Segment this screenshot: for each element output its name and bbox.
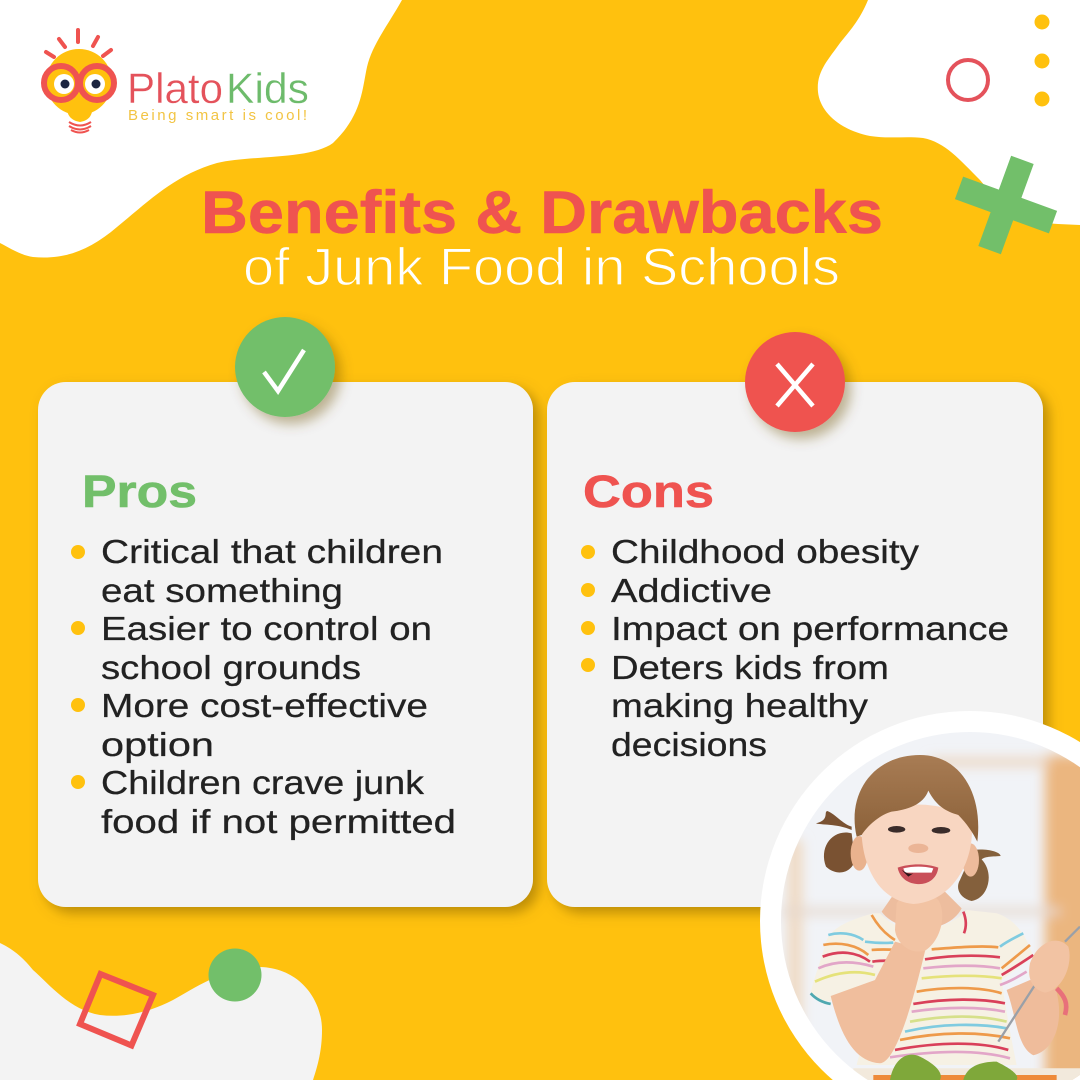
title line 1: Benefits & Drawbacks: [201, 179, 883, 246]
decoration: red ring: [948, 60, 988, 100]
photo white ring: [760, 711, 1080, 1080]
photo: smiling child eating: [760, 711, 1080, 1080]
ears: [851, 836, 868, 871]
cons list: decisions: [611, 727, 767, 764]
cons list: making healthy: [611, 688, 868, 725]
panel: pros: [38, 317, 533, 907]
decoration: green cross: [943, 143, 1069, 267]
right hand: [1029, 941, 1070, 993]
cons list: Addictive: [611, 573, 772, 610]
photo illustration: [770, 720, 1080, 1080]
face: [862, 805, 972, 904]
pros list: [71, 534, 456, 841]
cons list: Impact on performance: [611, 611, 1009, 648]
blob: top left white: [0, 0, 402, 258]
decoration: red square: [80, 974, 153, 1046]
raised hand: [895, 923, 942, 950]
fork: [998, 927, 1080, 1042]
pros card: [38, 382, 533, 907]
icon: light bulb with glasses: [44, 30, 114, 132]
cons list: [581, 534, 1009, 764]
pros list: Critical that children: [101, 534, 443, 571]
pros list: option: [101, 727, 214, 764]
icon: cross badge: [745, 332, 845, 432]
broccoli: [890, 1055, 941, 1080]
title: [201, 179, 883, 297]
cons heading: Cons: [583, 466, 714, 517]
logo: PlatoKids: Kids: [226, 65, 309, 113]
plate: [853, 1068, 1080, 1080]
eyes: [888, 826, 905, 833]
nose and mouth: [908, 844, 928, 853]
pros heading: Pros: [82, 466, 197, 517]
decoration: yellow dots: [1034, 14, 1050, 106]
pros list: eat something: [101, 573, 343, 610]
pros list: Children crave junk: [101, 765, 424, 802]
logo tagline: Being smart is cool!: [128, 107, 307, 124]
decoration: green dot: [208, 948, 262, 1002]
neck: [882, 892, 962, 926]
pros list: school grounds: [101, 650, 361, 687]
cons card: [547, 382, 1043, 907]
pros list: food if not permitted: [101, 804, 456, 841]
arms: [831, 942, 925, 1063]
pigtails: [816, 811, 855, 872]
blob: bottom left light: [0, 943, 322, 1080]
logo: PlatoKids: [44, 30, 309, 132]
shirt: [811, 910, 1033, 1065]
title line 2: of Junk Food in Schools: [243, 238, 840, 297]
logo wordmark: Plato: [127, 65, 223, 113]
cons list: Childhood obesity: [611, 534, 919, 571]
hair: [855, 755, 978, 842]
pros list: More cost-effective: [101, 688, 428, 725]
blob: top right white: [818, 0, 1080, 225]
icon: check badge: [235, 317, 335, 417]
pros list: Easier to control on: [101, 611, 432, 648]
panel: cons: [547, 332, 1043, 907]
cons list: Deters kids from: [611, 650, 889, 687]
